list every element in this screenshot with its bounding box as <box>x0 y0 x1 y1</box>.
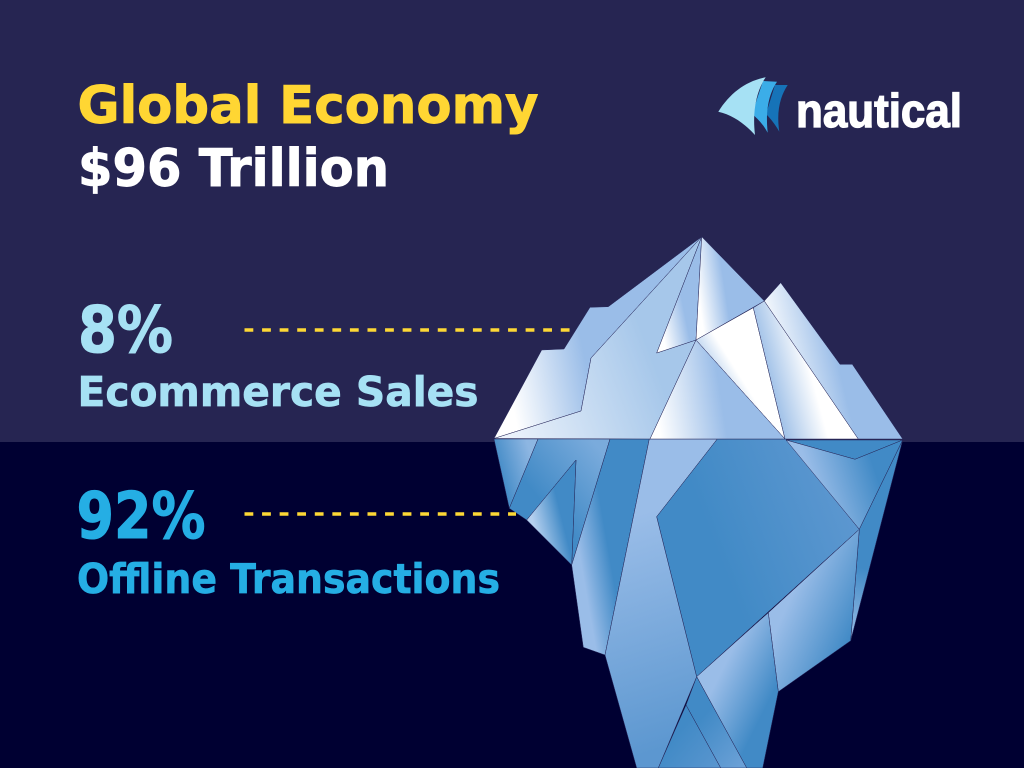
icon: back sail <box>766 85 788 132</box>
background: above water <box>0 0 1024 442</box>
title <box>78 76 538 199</box>
stat: 8% ecommerce <box>78 294 478 416</box>
icon: middle sail <box>752 81 777 133</box>
label: Ecommerce Sales: Ecommerce Sales <box>78 368 478 416</box>
iceberg: underwater part <box>494 439 903 768</box>
number: 8%: 8% <box>78 294 173 368</box>
stat: 92% offline <box>76 480 500 603</box>
heading: Global Economy: Global Economy <box>78 76 538 136</box>
connector: 8% dashed line <box>244 328 570 332</box>
wordmark: nautical <box>796 84 962 137</box>
iceberg <box>494 237 903 768</box>
number: 92%: 92% <box>76 480 206 554</box>
background: below water <box>0 442 1024 768</box>
label: Offline Transactions: Offline Transactions <box>77 555 500 603</box>
icon: front sail <box>718 77 766 135</box>
logo: nautical <box>718 77 962 137</box>
connector: 92% dashed line <box>244 512 516 516</box>
heading: $96 Trillion: $96 Trillion <box>78 139 389 199</box>
iceberg: above-water part <box>494 237 903 439</box>
